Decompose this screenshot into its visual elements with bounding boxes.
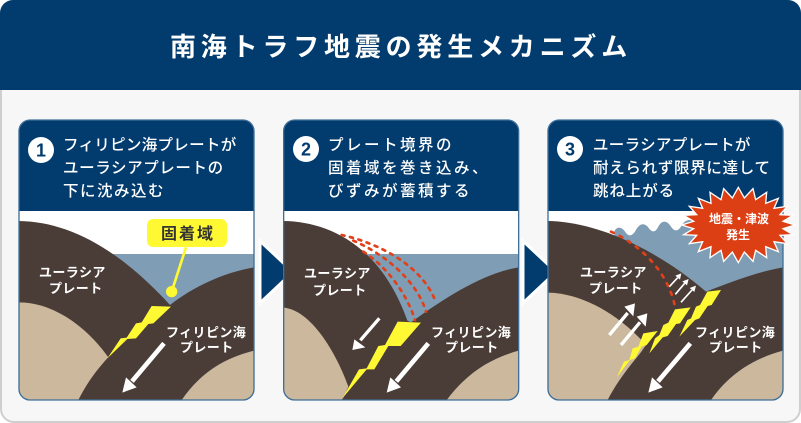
label: Philippine plate: プレート — [180, 340, 234, 355]
panel 1 heading — [63, 135, 237, 200]
panel 2 — [284, 120, 519, 400]
panel 1 heading: 下に沈み込む — [63, 182, 165, 200]
callout: 固着域 — [147, 219, 227, 247]
panel 3 — [548, 120, 795, 400]
callout: 地震・津波発生: 発生 — [726, 227, 750, 242]
label: Eurasian plate: プレート — [589, 281, 643, 296]
label: Eurasian plate: プレート — [313, 283, 367, 298]
callout: 地震・津波発生: 地震・津波 — [709, 211, 769, 226]
panel 3 illustration — [548, 120, 795, 400]
label: Eurasian plate: ユーラシア — [580, 265, 647, 280]
title banner — [0, 0, 801, 90]
panel 2 heading: 固着域を巻き込み、 — [328, 159, 490, 177]
number badge 2 — [293, 136, 319, 162]
panel 2 heading: プレート境界の — [328, 136, 454, 154]
number badge 3 — [557, 136, 583, 162]
arrow: step 1 to 2 — [260, 241, 293, 303]
panel 1 heading: フィリピン海プレートが — [63, 135, 237, 154]
label: Philippine plate: フィリピン海 — [166, 325, 246, 340]
label: Eurasian plate — [39, 265, 106, 296]
callout: 固着域: 固着域 — [161, 224, 215, 243]
arrow: step 2 to 3 — [523, 241, 556, 303]
title: 南海トラフ地震の発生メカニズム — [170, 32, 632, 62]
number badge 1: 1 — [36, 140, 46, 160]
panel 2 heading — [328, 136, 490, 200]
label: Eurasian plate: ユーラシア — [304, 266, 371, 281]
label: Eurasian plate: プレート — [49, 281, 103, 296]
label: Philippine plate: プレート — [709, 340, 763, 355]
label: Philippine plate: フィリピン海 — [431, 325, 511, 340]
number badge 1 — [28, 137, 54, 163]
label: Eurasian plate: ユーラシア — [39, 265, 106, 280]
panel 1 illustration — [19, 120, 254, 400]
panel 3 heading: 跳ね上がる — [593, 181, 675, 200]
panel 1 heading: ユーラシアプレートの — [63, 159, 224, 177]
callout: 地震・津波発生 — [709, 211, 769, 242]
panel 2 heading: びずみが蓄積する — [328, 181, 472, 200]
label: Philippine plate — [166, 325, 246, 355]
panel 3 heading — [593, 135, 771, 200]
label: Eurasian plate — [304, 266, 371, 298]
number badge 3: 3 — [565, 140, 575, 160]
panel 3 heading: 耐えられず限界に達して — [593, 159, 771, 177]
label: Philippine plate: フィリピン海 — [695, 325, 775, 340]
panel 2 illustration — [284, 120, 519, 400]
label: Eurasian plate — [580, 265, 647, 296]
label: Philippine plate — [695, 325, 775, 355]
label: Philippine plate — [431, 325, 511, 355]
panel 1 — [19, 120, 254, 400]
panel 3 heading: ユーラシアプレートが — [593, 135, 751, 154]
label: Philippine plate: プレート — [445, 340, 499, 355]
number badge 2: 2 — [301, 140, 311, 160]
